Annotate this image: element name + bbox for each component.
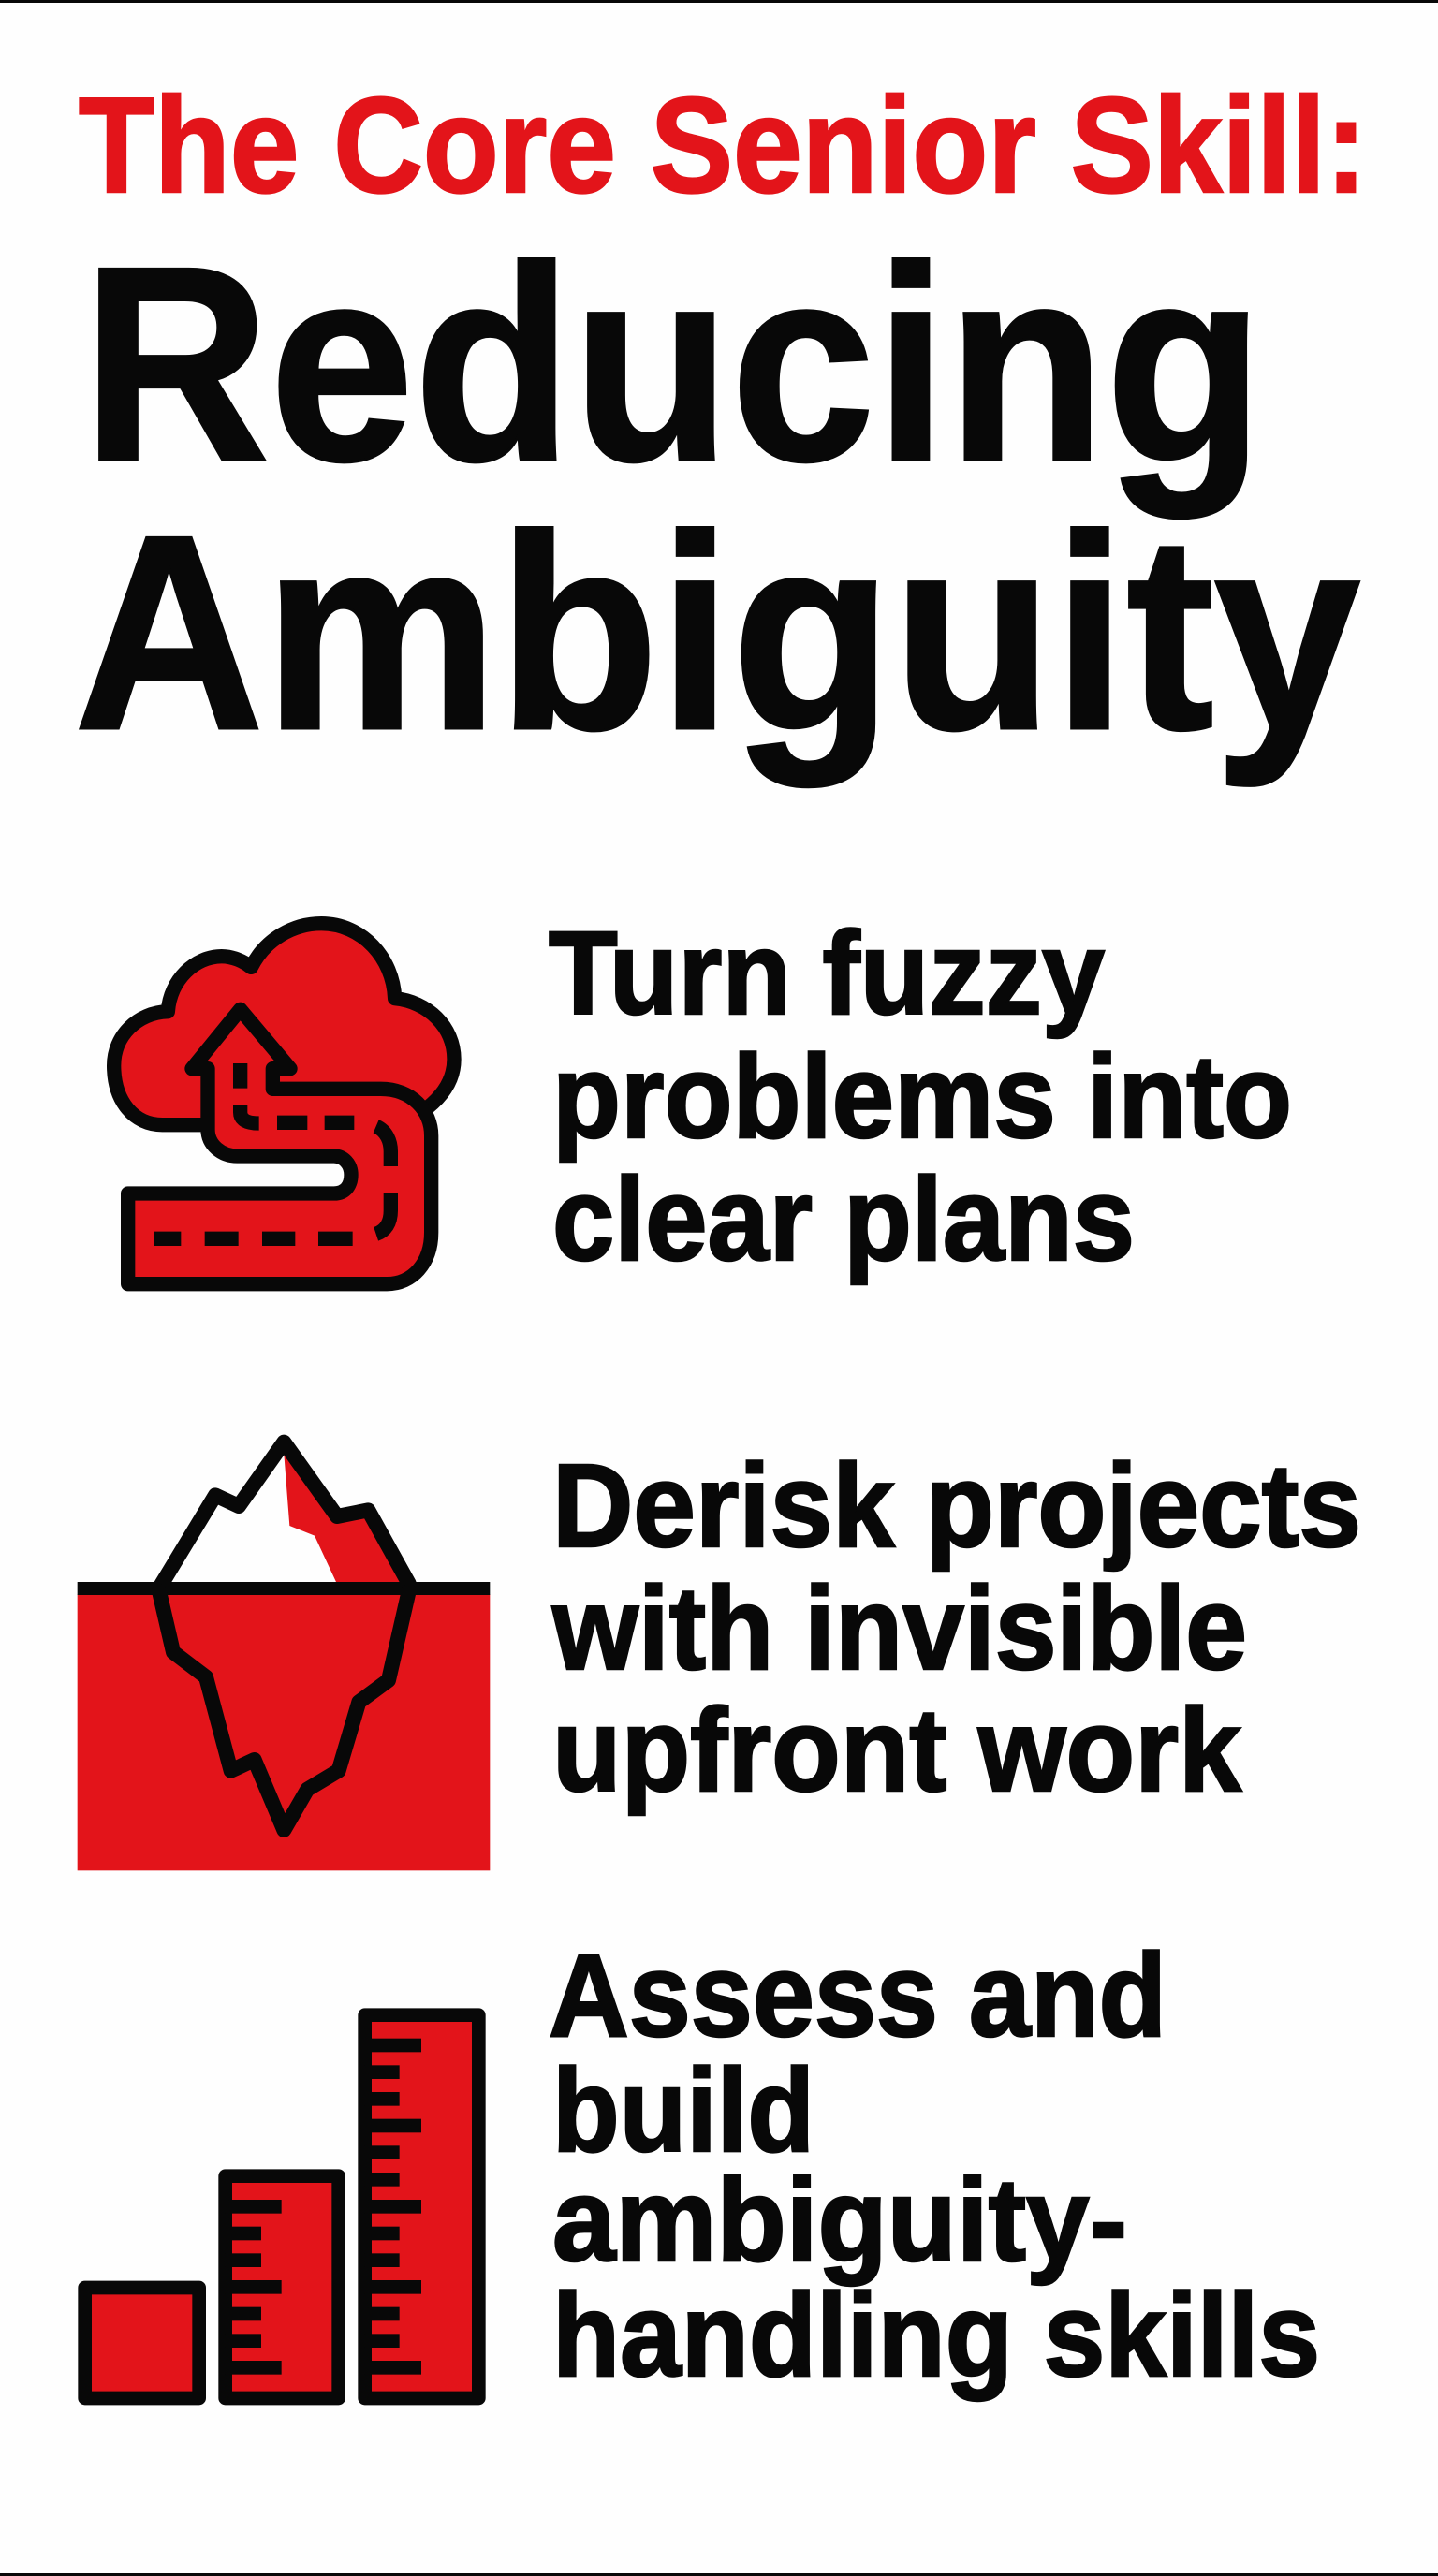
text: assess and build ambiguity-handling skills [549, 1929, 1320, 2401]
title: main heading [74, 209, 1362, 789]
panel: assess and build skills [85, 1929, 1320, 2401]
text: derisk projects with invisible upfront work [551, 1440, 1361, 1816]
text: assess and build ambiguity-handling skills: ambiguity- [552, 2154, 1127, 2286]
text: assess and build ambiguity-handling skills: handling skills [552, 2269, 1320, 2401]
panel: fuzzy problems to clear plans [114, 907, 1292, 1285]
icon: iceberg above and below waterline [78, 1442, 490, 1870]
icon: cloud with winding road arrow [114, 924, 454, 1284]
text: turn fuzzy problems into clear plans: clear plans [552, 1153, 1135, 1285]
text: derisk projects with invisible upfront work: upfront work [552, 1684, 1242, 1816]
icon: three rising rulers [85, 2015, 478, 2398]
text: turn fuzzy problems into clear plans: problems into [552, 1031, 1292, 1163]
text: derisk projects with invisible upfront work: Derisk projects [552, 1440, 1361, 1572]
text: assess and build ambiguity-handling skills: build [552, 2044, 814, 2176]
title: main heading: Reducing [82, 209, 1264, 520]
panel: derisk projects [78, 1440, 1361, 1870]
text: turn fuzzy problems into clear plans: Turn fuzzy [549, 907, 1105, 1039]
title: main heading: Ambiguity [74, 477, 1362, 789]
text: turn fuzzy problems into clear plans [549, 907, 1292, 1285]
text: derisk projects with invisible upfront work: with invisible [551, 1562, 1247, 1694]
text: assess and build ambiguity-handling skills: Assess and [549, 1929, 1167, 2061]
